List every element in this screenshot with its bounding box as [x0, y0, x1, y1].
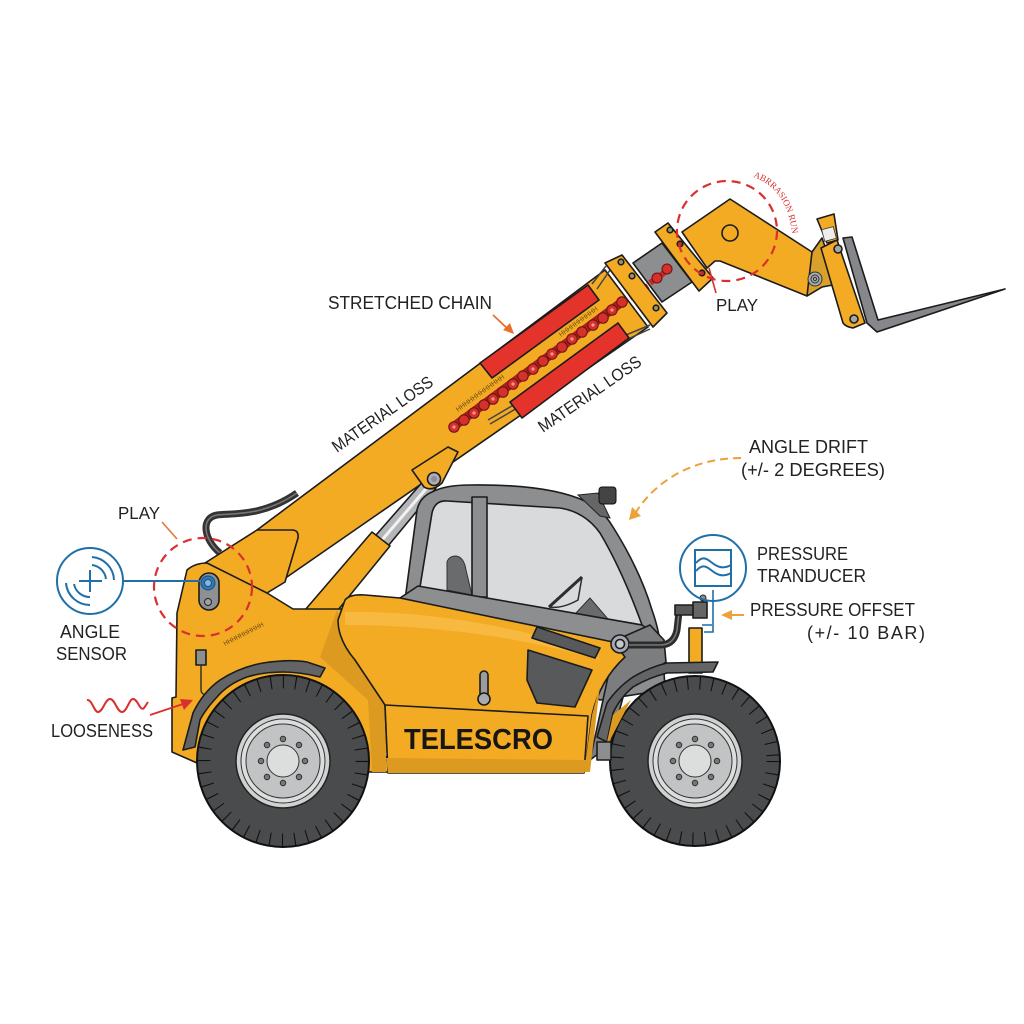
panel highlight [345, 612, 600, 660]
boom pivot bracket [412, 447, 458, 489]
machine body [172, 563, 629, 773]
telescopic boom [205, 243, 692, 600]
steering wheel [549, 577, 608, 619]
front body panel [338, 595, 625, 770]
fork [843, 237, 1005, 332]
name plate shading [386, 758, 586, 773]
micro text along chain, upper: HHHHHHHHHH [558, 306, 599, 339]
angle sensor icon and label: SENSOR [56, 644, 127, 664]
callout: play at boom base [118, 503, 252, 636]
boom collar plate [605, 255, 667, 327]
lower name plate [385, 705, 588, 773]
pressure offset callout [721, 600, 925, 643]
pressure transducer icon and label [680, 535, 866, 632]
lower door vent [527, 650, 592, 707]
pressure transducer icon and label: TRANDUCER [757, 566, 866, 586]
upper door vent [532, 627, 600, 658]
pressure line and transducer [629, 595, 707, 673]
mirror [578, 487, 616, 518]
front fender [597, 662, 718, 760]
curved micro text [753, 177, 792, 232]
boom head and fork [655, 199, 1005, 332]
callout: play at boom base: PLAY [118, 503, 160, 523]
carriage [817, 214, 865, 328]
side hoses near red bars [488, 266, 650, 424]
pivot link plate [199, 573, 219, 610]
cab [400, 485, 666, 760]
pressure transducer icon and label: PRESSURE [757, 544, 848, 564]
tilt link [807, 238, 838, 296]
lower red wear bar [510, 323, 629, 418]
stretched chain [449, 264, 672, 432]
head collar plate [655, 223, 713, 291]
front body strip [584, 660, 622, 772]
rear wheel [197, 675, 369, 847]
pressure offset callout: (+/- 10 BAR) [807, 623, 925, 643]
upper red wear bar [480, 285, 599, 378]
stretched chain label: STRETCHED CHAIN [328, 293, 492, 313]
angle sensor icon and label [56, 548, 200, 664]
stretched chain label [328, 293, 514, 334]
rear fender [183, 661, 325, 750]
callout: play at boom head [676, 172, 798, 315]
micro text along chain, lower: HHHHHHHHHHHH [455, 374, 506, 414]
rear chassis [172, 563, 390, 772]
angle drift callout [629, 437, 885, 520]
rear shading [320, 610, 386, 772]
pivot pin [722, 225, 738, 241]
micro text near rear pivot: HHHHHHHHHH [223, 622, 265, 648]
window sill [400, 586, 652, 645]
lower front frame [590, 625, 666, 760]
looseness callout: LOOSENESS [51, 721, 153, 741]
callout: play at boom head: ABRRASION RUN [753, 172, 798, 233]
articulated head [682, 199, 822, 296]
door handle [478, 671, 490, 705]
material loss label, upper: MATERIAL LOSS [328, 372, 437, 456]
angle drift callout: ANGLE DRIFT [749, 437, 868, 457]
angle sensor icon and label: ANGLE [60, 622, 120, 642]
angle drift callout: (+/- 2 DEGREES) [741, 460, 885, 480]
material loss label, lower: MATERIAL LOSS [535, 352, 645, 436]
hydraulic hose at boom base [206, 493, 297, 553]
cab window [420, 501, 642, 625]
pressure offset callout: PRESSURE OFFSET [750, 600, 915, 620]
lift cylinder [305, 478, 436, 610]
door pillar [472, 497, 487, 597]
cab frame [405, 485, 665, 700]
inner boom section [633, 243, 692, 302]
tilt pivot [808, 272, 822, 286]
rear sensor box [196, 650, 206, 695]
callout: play at boom head: PLAY [716, 295, 758, 315]
driver seat [447, 556, 472, 595]
boom rear housing [205, 530, 298, 600]
front cross-link [611, 635, 629, 653]
outer boom section [257, 270, 648, 577]
brand name: TELESCRO [404, 724, 553, 756]
looseness callout [51, 699, 193, 741]
front wheel [610, 676, 780, 846]
